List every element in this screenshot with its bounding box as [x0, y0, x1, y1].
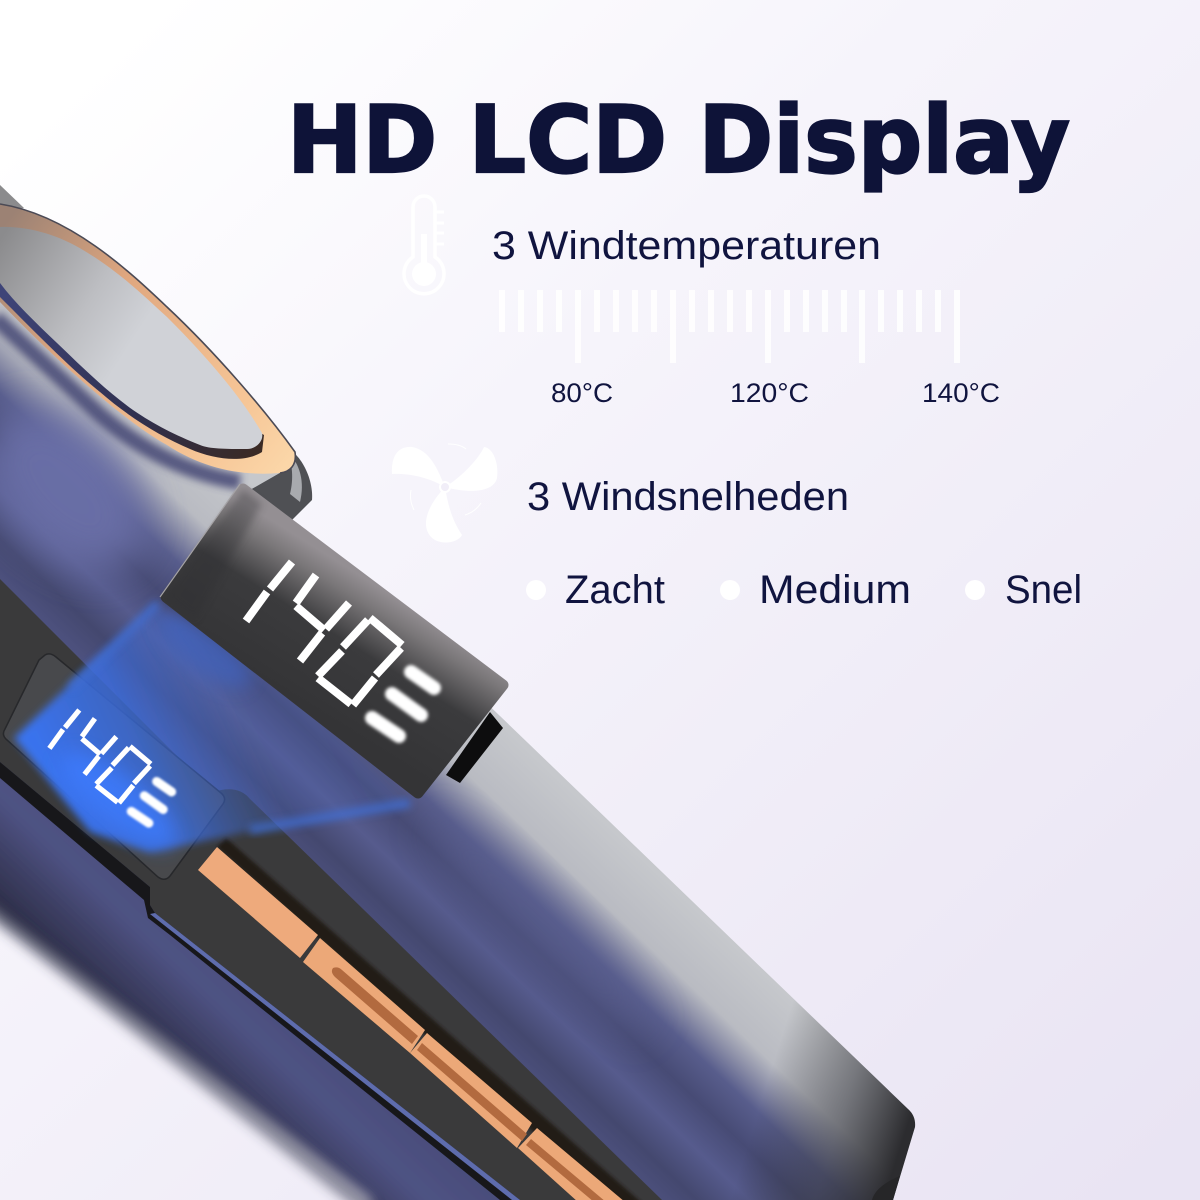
temperature labels: 140°C	[922, 378, 1000, 408]
temperature labels: 120°C	[730, 378, 809, 408]
option: snel	[965, 568, 1082, 612]
blue light beam	[14, 599, 410, 862]
button 4	[518, 1128, 625, 1200]
option: zacht: Zacht	[565, 568, 665, 612]
icon: fan	[392, 444, 497, 543]
temperature scale ticks	[499, 290, 960, 363]
barrel end ring	[0, 204, 295, 474]
button 3	[410, 1033, 532, 1148]
option: medium: Medium	[759, 568, 911, 612]
small display panel	[3, 654, 225, 879]
large display digits 140	[246, 562, 434, 736]
barrel top collar	[0, 185, 312, 522]
title: HD LCD Display	[287, 86, 1070, 194]
small display digits 140	[49, 710, 172, 823]
button 1	[198, 847, 318, 958]
product: hair styler	[0, 185, 915, 1200]
temperature labels: 80°C	[551, 378, 613, 408]
body lower soft edge	[0, 660, 660, 1200]
heading: wind temperatures: 3 Windtemperaturen	[492, 224, 881, 268]
connector behind display	[446, 712, 503, 783]
speed options	[526, 568, 1082, 612]
icon: thermometer	[404, 196, 444, 294]
body main	[0, 295, 915, 1200]
large display panel	[160, 484, 503, 793]
heading: wind speeds: 3 Windsnelheden	[527, 475, 849, 519]
button 2	[303, 938, 425, 1053]
control strip	[0, 579, 662, 1200]
option: snel: Snel	[1005, 568, 1082, 612]
button shadow	[217, 838, 650, 1200]
temperature labels	[551, 378, 1000, 408]
copper buttons	[198, 838, 650, 1200]
